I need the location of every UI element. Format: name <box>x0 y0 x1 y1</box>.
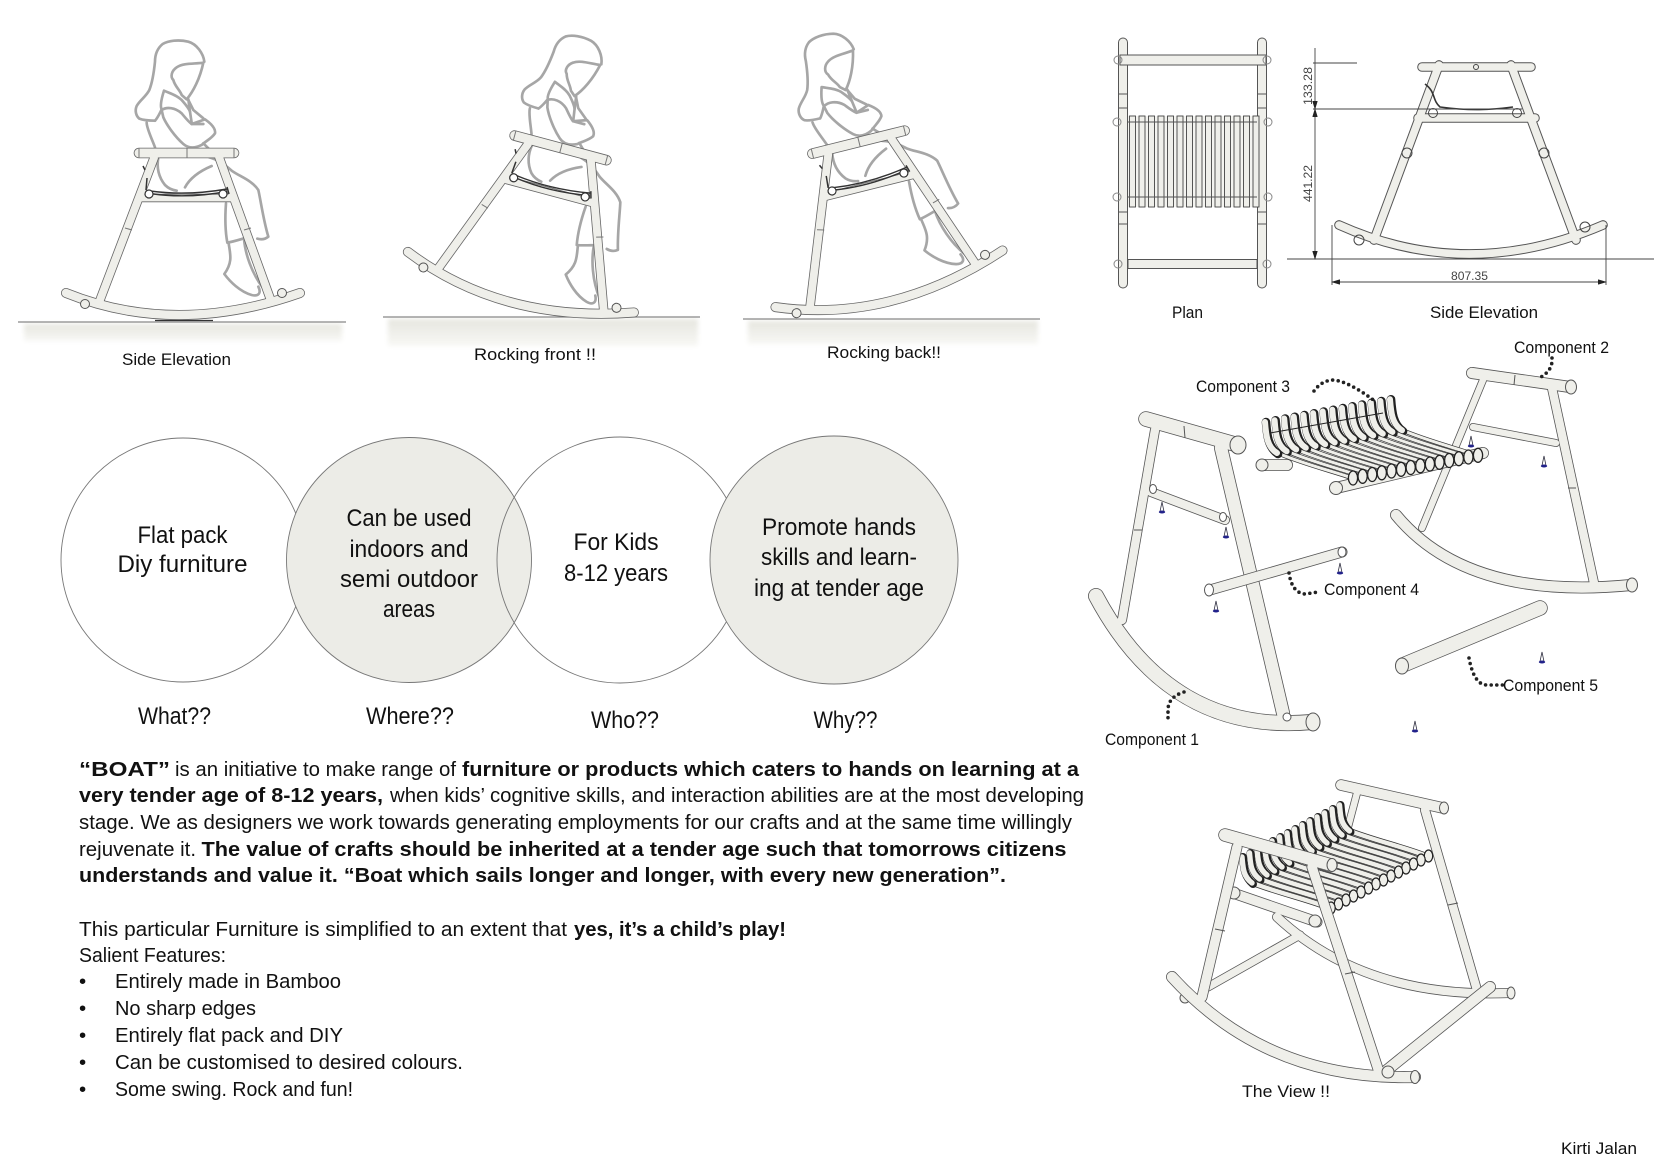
figure: side elevation with child <box>18 40 346 341</box>
label: component 1: Component 1 <box>1105 730 1199 749</box>
drawing: dimensioned side elevation: 441.22 <box>1303 165 1315 202</box>
figure: assembled perspective view <box>1172 785 1515 1084</box>
venn diagram: what where who why: For Kids <box>574 529 658 556</box>
text block: salient features: • <box>79 1051 86 1074</box>
caption: rocking front: Rocking front !! <box>474 345 596 364</box>
text block: salient features: Can be customised to desired colours. <box>115 1051 463 1074</box>
label: component 4: Component 4 <box>1324 580 1419 599</box>
exploded view: component 5 bar <box>1396 608 1540 674</box>
icons: fixing pegs <box>1159 436 1547 732</box>
text block: salient features: No sharp edges <box>115 997 256 1020</box>
drawing: dimensioned side elevation <box>1287 48 1654 285</box>
text block: salient features: Entirely made in Bamboo <box>115 970 341 993</box>
figure: rocking front <box>383 8 700 346</box>
drawing: plan view <box>1113 38 1272 288</box>
credit: author name: Kirti Jalan <box>1561 1139 1637 1158</box>
caption: the view: The View !! <box>1242 1082 1330 1101</box>
venn diagram: what where who why: Diy furniture <box>118 551 248 578</box>
venn diagram: what where who why: Promote hands <box>762 514 916 541</box>
venn diagram: what where who why: Flat pack <box>138 522 228 549</box>
drawing: dimensioned side elevation: 133.28 <box>1303 67 1315 105</box>
leader: component 4 <box>1289 573 1318 594</box>
venn diagram: what where who why: 8-12 years <box>564 560 668 587</box>
venn diagram: what where who why: semi outdoor <box>340 566 478 593</box>
text block: salient features <box>79 918 786 1101</box>
venn diagram: what where who why: Can be used <box>346 505 472 532</box>
venn diagram: what where who why: areas <box>383 596 435 623</box>
text block: description: stage. We as designers we work towards generating employments for our crafts and at the same time willingly <box>79 811 1073 834</box>
exploded view: component 2 <box>1396 373 1638 592</box>
text block: salient features: yes, it’s a child’s play! <box>574 918 786 941</box>
text block: description: understands and value it. “Boat which sails longer and longer, with every new generation”. <box>79 864 1006 887</box>
label: component 5: Component 5 <box>1503 676 1598 695</box>
text block: salient features: • <box>79 970 86 993</box>
text block: description <box>79 758 1084 887</box>
text block: salient features: • <box>79 1078 86 1101</box>
caption: side elevation right: Side Elevation <box>1430 303 1538 322</box>
text block: description: is an initiative to make range of <box>175 758 456 781</box>
text block: salient features: This particular Furniture is simplified to an extent that <box>79 918 567 941</box>
label: where: Where?? <box>366 703 454 730</box>
leader: component 2 <box>1541 358 1552 377</box>
caption: plan: Plan <box>1172 303 1203 322</box>
text block: salient features: • <box>79 997 86 1020</box>
text block: description: when kids’ cognitive skills, and interaction abilities are at the most developing <box>389 784 1084 807</box>
figure: rocking back <box>714 5 1040 344</box>
text block: salient features: Salient Features: <box>79 944 226 967</box>
caption: side elevation: Side Elevation <box>122 350 231 369</box>
label: component 2: Component 2 <box>1514 338 1609 357</box>
venn diagram: what where who why: indoors and <box>350 536 468 563</box>
label: what: What?? <box>138 703 211 730</box>
exploded view: component 3 seat <box>1256 399 1483 494</box>
text block: salient features: Entirely flat pack and DIY <box>115 1024 343 1047</box>
text block: description: The value of crafts should be inherited at a tender age such that tomorrows citizens <box>202 838 1066 861</box>
venn diagram: what where who why: ing at tender age <box>754 575 924 602</box>
text block: salient features: • <box>79 1024 86 1047</box>
text block: description: very tender age of 8-12 years, <box>79 784 383 807</box>
text block: description: furniture or products which caters to hands on learning at a <box>462 758 1080 781</box>
leader: component 3 <box>1314 380 1376 402</box>
exploded view: component 4 bar <box>1204 547 1346 596</box>
venn diagram: what where who why <box>61 436 958 684</box>
venn diagram: what where who why: skills and learn- <box>761 544 917 571</box>
text block: salient features: Some swing. Rock and fun! <box>115 1078 353 1101</box>
drawing: dimensioned side elevation: 807.35 <box>1451 271 1488 283</box>
exploded view: component 1 <box>1096 419 1320 731</box>
label: who: Who?? <box>591 707 659 734</box>
label: why: Why?? <box>814 707 878 734</box>
leader: component 5 <box>1469 658 1505 685</box>
leader: component 1 <box>1168 692 1184 723</box>
text block: description: rejuvenate it. <box>79 838 196 861</box>
text block: description: “BOAT” <box>79 758 170 781</box>
caption: rocking back: Rocking back!! <box>827 343 941 362</box>
label: component 3: Component 3 <box>1196 377 1290 396</box>
